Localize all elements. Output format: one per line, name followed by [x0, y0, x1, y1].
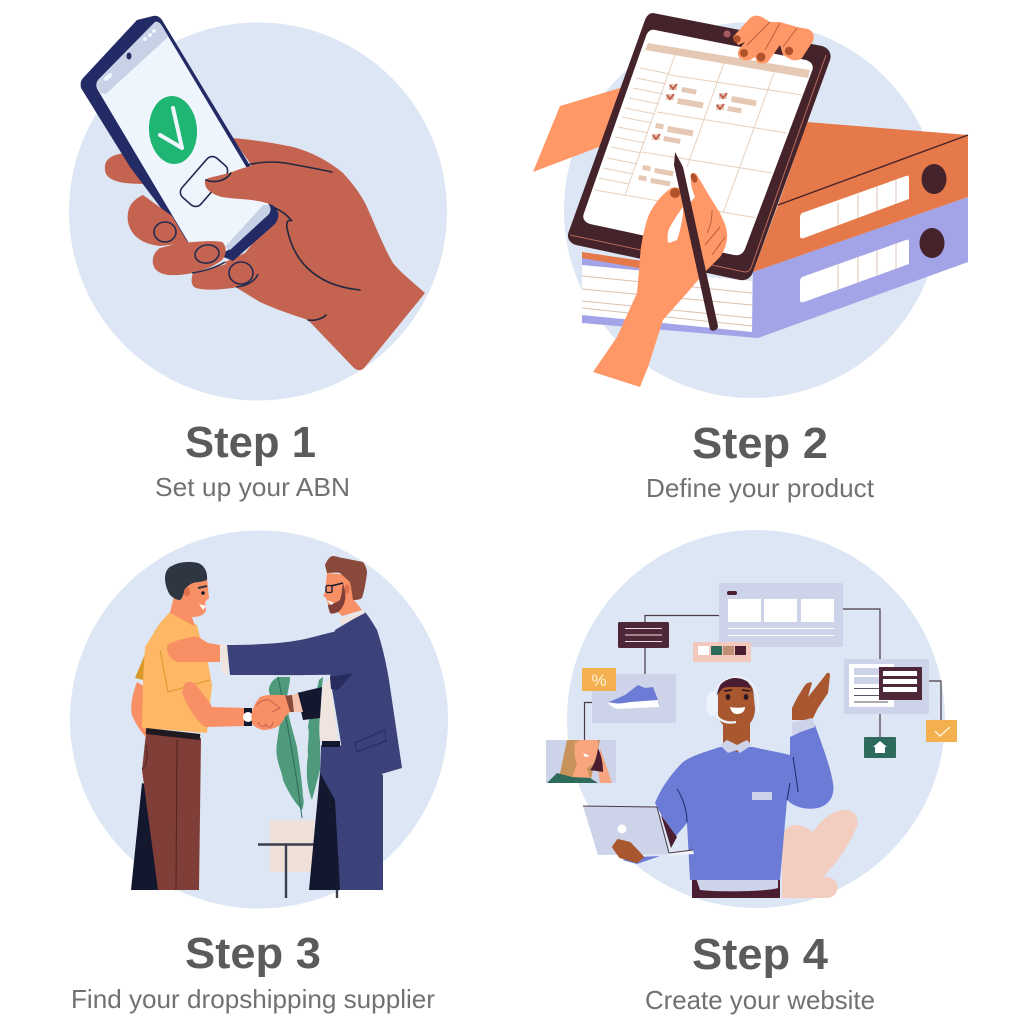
icon: fingernails [154, 222, 258, 287]
icon: pink plant [782, 810, 858, 898]
text: step 1 description: Set up your ABN [155, 472, 350, 502]
icon: outlined button [178, 154, 230, 209]
text: step 4 description: Create your website [645, 985, 875, 1015]
heading: step 2: Step 2 [692, 419, 828, 468]
icon: man in navy suit [220, 556, 402, 890]
icon: form card [844, 659, 929, 714]
icon: percent tag [582, 668, 616, 691]
icon: check tag [926, 720, 957, 742]
background circle [70, 530, 448, 908]
icon: smartphone [81, 16, 278, 261]
icon: green check badge [147, 94, 199, 166]
icon: hand on shoulder [167, 636, 220, 662]
icon: left arm [533, 85, 630, 172]
icon: colour palette [693, 642, 751, 662]
icon: top hand [733, 16, 814, 63]
agent raised hand [792, 673, 830, 720]
heading: step 4: Step 4 [692, 930, 829, 979]
icon: hand palm [225, 138, 425, 370]
icon: wristwatch [243, 708, 253, 726]
icon: thumb [205, 160, 330, 220]
heading: step 3: Step 3 [185, 929, 321, 978]
icon: stylus [674, 152, 718, 331]
icon: home tag [864, 737, 896, 758]
checklist rows [638, 84, 757, 186]
text: step 2 description: Define your product [646, 473, 875, 503]
icon: binder pages [582, 252, 758, 338]
icon: dark text note [618, 622, 669, 648]
background circle [567, 530, 945, 908]
connector lines [584, 609, 941, 740]
agent head with headset [706, 677, 758, 730]
panel: step 1 illustration [69, 16, 447, 401]
icon: fingers [128, 195, 259, 290]
icon: percent tag: % [591, 671, 607, 690]
icon: handshake [251, 695, 290, 730]
icon: plant and table [258, 677, 337, 898]
icon: hand back finger [105, 150, 160, 184]
panel: step 2 illustration [533, 13, 968, 398]
table header band [645, 43, 810, 78]
icon: customer photo [546, 740, 616, 783]
panel: step 4 illustration [546, 530, 957, 908]
text: step 3 description: Find your dropshipping supplier [71, 984, 435, 1014]
icon: shoe card [592, 674, 676, 723]
icon: orange binder [753, 122, 968, 272]
icon: hand creases [206, 162, 360, 320]
icon: man in yellow shirt [131, 562, 253, 890]
table grid [595, 55, 802, 218]
icon: tablet [568, 13, 831, 280]
icon: bottom hand [593, 172, 727, 387]
heading: step 1: Step 1 [185, 418, 316, 467]
icon: man 2 head [323, 556, 367, 625]
agent neck and collar [723, 722, 750, 752]
background circle [69, 22, 447, 400]
icon: purple binder [752, 197, 968, 338]
icon: laptop [583, 806, 694, 864]
background circle [564, 22, 940, 398]
icon: man 1 head [165, 562, 209, 626]
icon: support agent [655, 673, 833, 898]
icon: webpage layout panel [719, 583, 843, 647]
panel: step 3 illustration [70, 530, 448, 908]
